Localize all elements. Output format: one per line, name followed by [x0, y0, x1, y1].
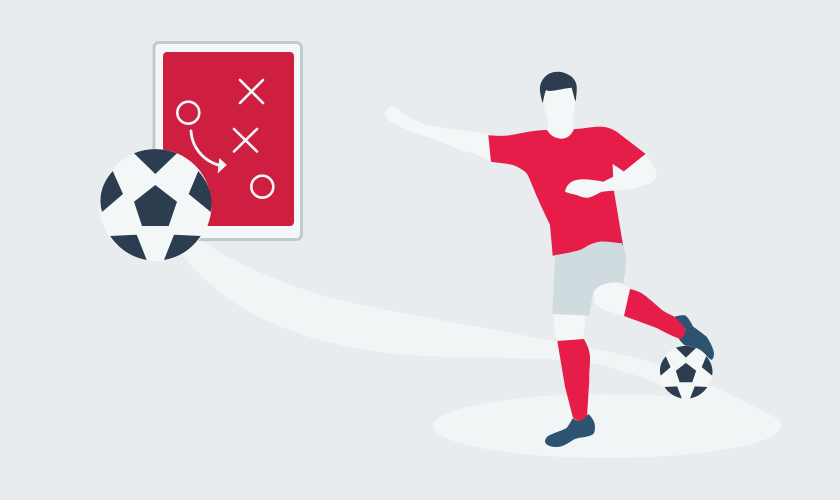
tactic mark: circle right [251, 176, 273, 198]
tactic mark: cross top [240, 80, 263, 103]
ground shadow ellipse [433, 394, 781, 458]
ball motion trail [180, 238, 781, 424]
standing knee [553, 314, 586, 341]
ball patches [100, 149, 212, 260]
tactic arrow [191, 131, 227, 174]
tactic mark: cross middle [234, 129, 257, 152]
red shirt [488, 127, 646, 256]
shorts [552, 242, 626, 316]
kicking boot [674, 315, 714, 360]
hair [540, 72, 577, 103]
tactics board [154, 42, 302, 240]
raised arm [385, 107, 491, 162]
board red surface [163, 52, 294, 226]
head and neck [544, 86, 576, 139]
kicking sock [624, 289, 686, 339]
standing boot [545, 414, 595, 447]
forearm and hand [565, 154, 657, 198]
large football [100, 149, 212, 261]
small football [660, 346, 713, 399]
standing sock [557, 339, 590, 421]
tactic mark: circle left [177, 102, 199, 124]
footballer [385, 72, 714, 447]
kicking knee [593, 282, 630, 316]
board frame [154, 42, 302, 240]
small ball patches [660, 346, 713, 398]
